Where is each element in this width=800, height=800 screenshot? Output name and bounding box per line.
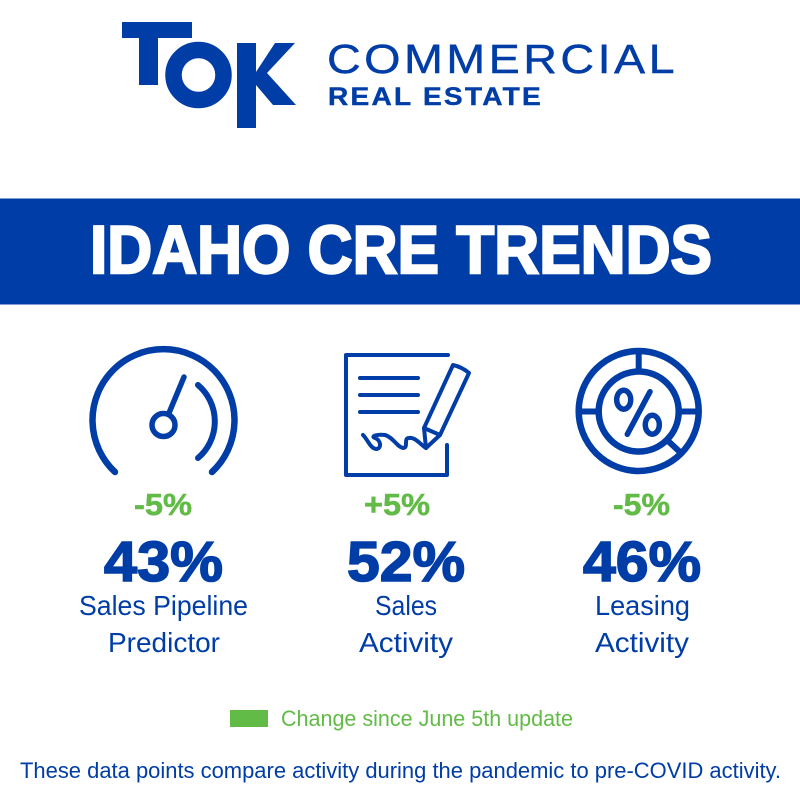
title banner	[0, 198, 800, 304]
panel: leasing activity	[579, 351, 701, 658]
change value: -5%	[134, 487, 192, 522]
main value: 46%	[583, 530, 701, 594]
label: Sales	[375, 590, 437, 621]
icon: percent donut chart	[579, 351, 699, 471]
logo: TOK Commercial Real Estate	[122, 22, 678, 128]
label: Sales Pipeline	[79, 590, 248, 621]
panel: sales pipeline predictor	[79, 349, 248, 658]
label line 2: Activity	[359, 627, 453, 658]
panel: sales activity	[346, 355, 469, 658]
legend: Change since June 5th update	[281, 706, 573, 731]
main value: 52%	[347, 530, 465, 594]
label line 2: Predictor	[108, 627, 220, 658]
main value: 43%	[104, 530, 223, 594]
label line 2: Activity	[595, 627, 689, 658]
title: IDAHO CRE TRENDS	[90, 212, 712, 288]
icon: document with pen and signature	[346, 355, 469, 475]
label: Leasing	[595, 590, 690, 621]
change value: -5%	[613, 487, 670, 522]
logo text: Commercial: COMMERCIAL	[327, 36, 678, 82]
logo text: Real Estate: REAL ESTATE	[328, 83, 543, 111]
icon: speedometer gauge	[93, 349, 235, 472]
change value: +5%	[364, 487, 430, 522]
footnote: These data points compare activity during the pandemic to pre-COVID activity.	[20, 758, 781, 783]
logo mark: TOK	[122, 22, 296, 128]
